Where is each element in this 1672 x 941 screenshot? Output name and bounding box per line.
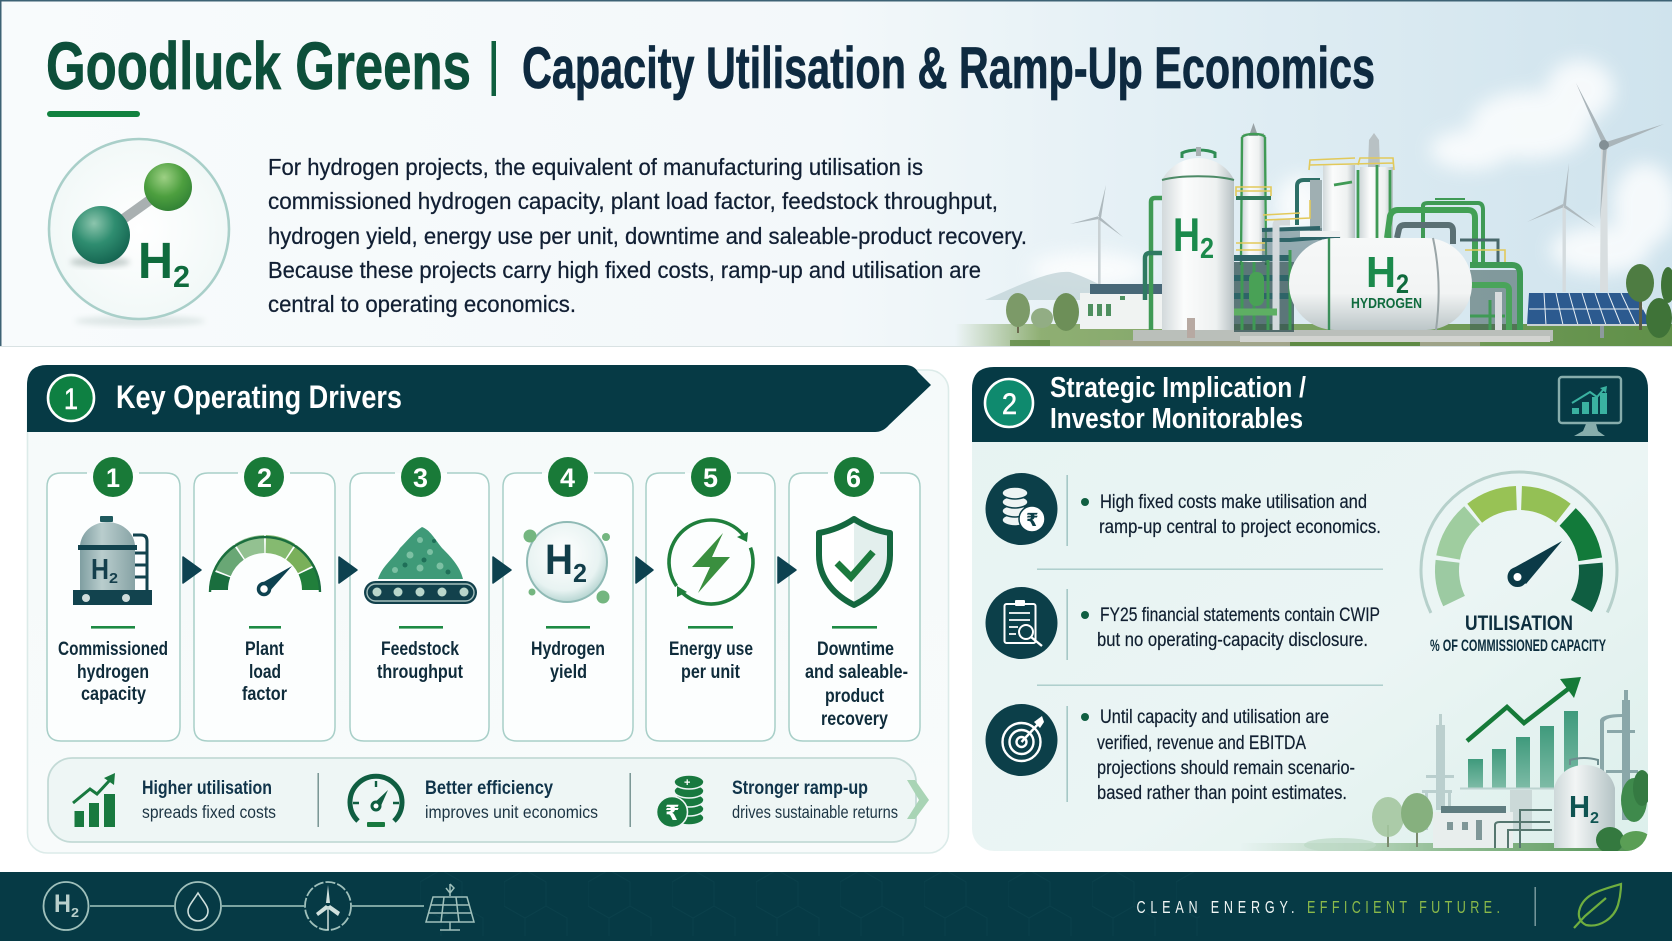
driver card 4 bbox=[503, 457, 633, 741]
intro paragraph: For hydrogen projects, the equivalent of manufacturing utilisation is bbox=[268, 154, 923, 180]
driver card 1: capacity bbox=[81, 684, 146, 705]
horizontal tank: 2 bbox=[1396, 269, 1409, 299]
footer icons bbox=[44, 882, 474, 930]
panel: strategic implication bbox=[972, 367, 1652, 853]
arrow: card 4 to 5 bbox=[636, 557, 653, 583]
heading banner: 2 bbox=[1002, 388, 1017, 421]
illustration: plant and growth chart bbox=[1240, 677, 1652, 853]
tank bbox=[1554, 758, 1615, 848]
driver card 5: per unit bbox=[681, 662, 741, 683]
driver card 6: 6 bbox=[846, 463, 861, 493]
wind turbine middle bbox=[1527, 163, 1596, 292]
tagline: CLEAN ENERGY. bbox=[1136, 898, 1295, 918]
icon: coins and rupee bbox=[986, 473, 1058, 545]
horizontal tank: H bbox=[1366, 248, 1396, 297]
arrow: card 5 to 6 bbox=[778, 557, 796, 583]
icon: leaf bbox=[1574, 884, 1621, 928]
left pipes bbox=[1145, 198, 1162, 330]
heading banner: Strategic Implication / bbox=[1050, 372, 1306, 404]
tagline: EFFICIENT FUTURE. bbox=[1307, 898, 1500, 918]
icon: monitor chart bbox=[1559, 377, 1621, 436]
central pipework bbox=[1234, 200, 1340, 332]
header band bbox=[0, 0, 1672, 347]
tank: 2 bbox=[1590, 810, 1599, 827]
driver card 4: 2 bbox=[573, 558, 587, 588]
ground bbox=[955, 324, 1672, 347]
trees bbox=[1006, 264, 1672, 338]
upper-right pipes bbox=[1387, 199, 1520, 330]
trend arrow bbox=[1467, 677, 1581, 741]
monitorable 3: based rather than point estimates. bbox=[1097, 783, 1347, 804]
intro paragraph: central to operating economics. bbox=[268, 291, 576, 317]
driver card 1: Commissioned bbox=[58, 639, 168, 660]
monitorable 1 bbox=[986, 473, 1381, 546]
heading banner bbox=[972, 367, 1648, 442]
icon: coins and rupee: ₹ bbox=[1026, 510, 1039, 531]
benefits strip: Better efficiency bbox=[425, 778, 553, 799]
heading banner: Key Operating Drivers bbox=[116, 379, 402, 415]
driver card 4: yield bbox=[550, 662, 587, 683]
title: Goodluck Greens bbox=[46, 29, 471, 104]
driver card 1: 1 bbox=[106, 463, 120, 493]
right tower bbox=[1600, 690, 1638, 820]
gauge: utilisation: UTILISATION bbox=[1465, 612, 1573, 635]
wind turbine left bbox=[1070, 185, 1123, 292]
monitorable 1: ramp-up central to project economics. bbox=[1099, 517, 1381, 538]
panel: key operating drivers bbox=[27, 365, 948, 853]
clouds bbox=[1030, 60, 1672, 288]
monitorable 3: Until capacity and utilisation are bbox=[1100, 707, 1329, 728]
vertical tank: 2 bbox=[1200, 233, 1214, 265]
driver card 1: hydrogen bbox=[77, 662, 149, 683]
icon: H2 molecule: H bbox=[138, 232, 173, 289]
driver card 1: 2 bbox=[109, 570, 118, 587]
heading banner bbox=[27, 365, 931, 432]
wind turbine large bbox=[1576, 83, 1664, 292]
icon: rupee coins: ₹ bbox=[665, 801, 680, 825]
footer icons: 2 bbox=[71, 905, 79, 920]
tank: H bbox=[1569, 789, 1590, 824]
driver card 4: 4 bbox=[560, 463, 575, 493]
driver card 6: and saleable- bbox=[805, 662, 908, 683]
benefits strip: Stronger ramp-up bbox=[732, 778, 868, 799]
driver card 6: product bbox=[825, 686, 885, 707]
benefits strip: improves unit economics bbox=[425, 802, 598, 822]
driver card 5 bbox=[646, 457, 775, 741]
driver card 5: 5 bbox=[703, 463, 718, 493]
icon: rising chart bbox=[73, 773, 115, 827]
driver card 6 bbox=[789, 457, 920, 741]
driver card 6: recovery bbox=[821, 709, 888, 730]
intro paragraph: Because these projects carry high fixed costs, ramp-up and utilisation are bbox=[268, 257, 981, 283]
arrow: card 3 to 4 bbox=[493, 557, 511, 583]
driver card 2 bbox=[194, 457, 335, 741]
driver card 3: Feedstock bbox=[381, 639, 459, 660]
benefits strip: drives sustainable returns bbox=[732, 802, 898, 822]
driver card 3: 3 bbox=[413, 463, 428, 493]
monitorable 2 bbox=[986, 587, 1380, 660]
horizontal tank: HYDROGEN bbox=[1351, 295, 1422, 312]
icon: target bbox=[986, 704, 1058, 776]
driver card 6: Downtime bbox=[817, 639, 894, 660]
monitorable 1: High fixed costs make utilisation and bbox=[1100, 492, 1367, 513]
benefits strip: spreads fixed costs bbox=[142, 802, 276, 822]
driver card 3: throughput bbox=[377, 662, 464, 683]
heading banner: 1 bbox=[64, 383, 78, 416]
intro paragraph: hydrogen yield, energy use per unit, downtime and saleable-product recovery. bbox=[268, 223, 1027, 249]
hydrogen plant bbox=[1133, 123, 1553, 342]
horizontal tank bbox=[1289, 238, 1472, 330]
driver card 2: load bbox=[249, 662, 281, 683]
solar panels bbox=[1527, 293, 1652, 338]
benefits strip bbox=[48, 758, 929, 842]
trees bbox=[1304, 793, 1433, 852]
monitorable 2: but no operating-capacity disclosure. bbox=[1097, 630, 1368, 651]
building bbox=[1433, 790, 1552, 848]
icon: speedometer bbox=[350, 776, 402, 827]
driver card 4: Hydrogen bbox=[531, 639, 605, 660]
icon: H2 molecule bbox=[49, 139, 229, 326]
monitorable 3 bbox=[986, 704, 1355, 804]
icon: rupee coins bbox=[656, 775, 704, 828]
driver card 1: H bbox=[91, 554, 109, 586]
driver card 2: Plant bbox=[245, 639, 285, 660]
heading banner: Investor Monitorables bbox=[1050, 403, 1303, 435]
monitorable 2: FY25 financial statements contain CWIP bbox=[1100, 605, 1380, 626]
driver card 1 bbox=[47, 457, 180, 741]
driver card 2: 2 bbox=[257, 463, 272, 493]
gauge: utilisation bbox=[1388, 439, 1650, 701]
driver card 4: H bbox=[545, 536, 573, 584]
intro paragraph bbox=[268, 154, 1027, 317]
vertical tank: H bbox=[1173, 208, 1200, 261]
footer icons: H bbox=[54, 890, 71, 918]
faded tower bbox=[1422, 714, 1454, 830]
title underline bbox=[47, 111, 140, 117]
foliage bbox=[1596, 770, 1652, 853]
driver card 3 bbox=[350, 457, 489, 741]
building bbox=[1080, 284, 1162, 329]
intro paragraph: commissioned hydrogen capacity, plant load factor, feedstock throughput, bbox=[268, 188, 998, 214]
chevron bbox=[907, 780, 929, 819]
bars bbox=[1468, 711, 1578, 788]
footer band bbox=[0, 872, 1672, 941]
arrow: card 2 to 3 bbox=[339, 557, 357, 583]
driver card 5: Energy use bbox=[669, 639, 753, 660]
title bbox=[46, 29, 1375, 104]
process columns bbox=[1236, 123, 1394, 265]
icon: clipboard bbox=[986, 587, 1058, 659]
monitorable 3: verified, revenue and EBITDA bbox=[1097, 733, 1306, 754]
vertical tank bbox=[1162, 147, 1234, 338]
monitorable 3: projections should remain scenario- bbox=[1097, 758, 1355, 779]
icon: rupee coins: + bbox=[684, 777, 690, 789]
benefits strip: Higher utilisation bbox=[142, 778, 272, 799]
tagline bbox=[1136, 898, 1500, 918]
driver card 2: factor bbox=[242, 684, 288, 705]
arrow: card 1 to 2 bbox=[183, 557, 201, 583]
mountains bbox=[985, 272, 1098, 300]
icon: H2 molecule: 2 bbox=[173, 259, 190, 294]
